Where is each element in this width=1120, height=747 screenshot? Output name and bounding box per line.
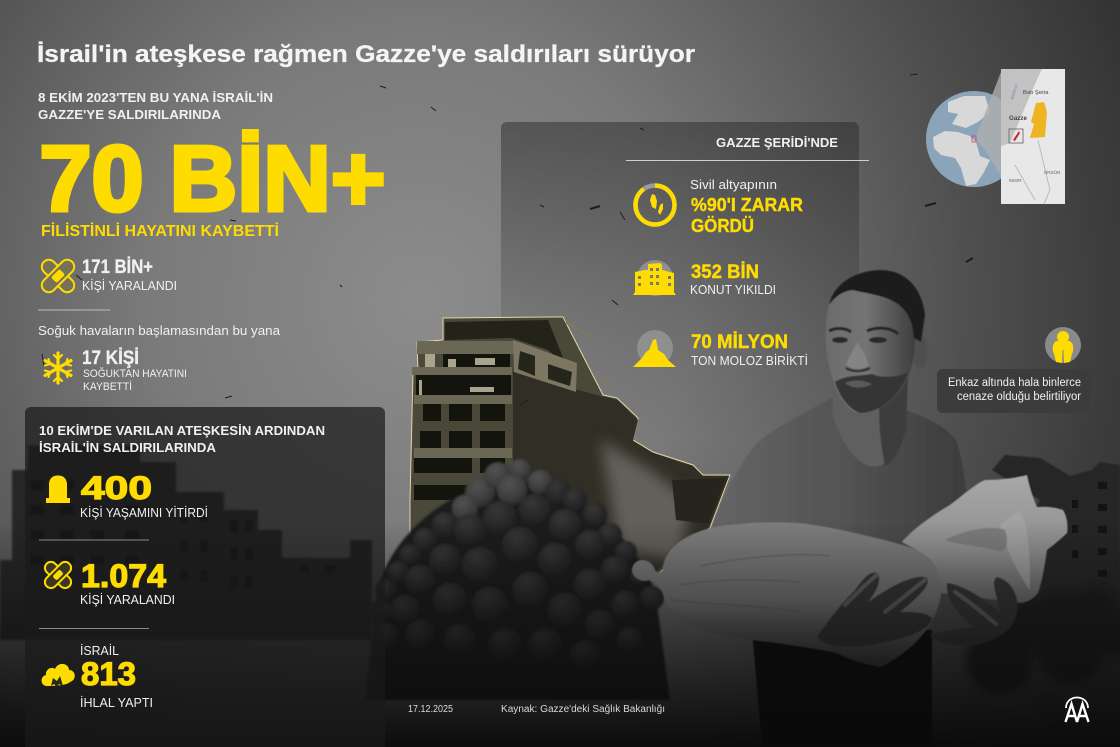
background city left <box>0 445 372 640</box>
callout: bodies under rubble: Enkaz altında hala binlerce <box>948 377 1081 389</box>
wounded stat: KİŞİ YARALANDI <box>82 278 177 293</box>
map labels: Batı Şeria <box>1023 90 1049 96</box>
rubble stat: TON MOLOZ BİRİKTİ <box>691 353 808 368</box>
zoom cone <box>975 72 1001 176</box>
man beard <box>835 372 908 413</box>
source: Kaynak: Gazze'deki Sağlık Bakanlığı <box>501 704 665 715</box>
callout: bodies under rubble <box>937 327 1090 413</box>
cold stat: KAYBETTİ <box>83 380 132 393</box>
killed stat: KİŞİ YAŞAMINI YİTİRDİ <box>80 505 208 520</box>
man face <box>826 287 915 413</box>
icon: bandage <box>39 257 77 295</box>
intro heading <box>38 90 273 122</box>
man shirt <box>712 398 967 600</box>
date: 17.12.2025 <box>408 704 453 715</box>
globe <box>926 72 1001 187</box>
big number: 70 BİN+ <box>40 126 385 230</box>
icon: bandage <box>42 559 74 591</box>
man eyes <box>832 337 848 343</box>
Europe <box>948 96 990 128</box>
infrastructure stat: Sivil altyapının <box>690 177 777 192</box>
panel heading: 10 EKİM'DE VARILAN ATEŞKESİN ARDINDAN <box>39 423 325 438</box>
man nose <box>846 342 868 369</box>
panel heading: İSRAİL'İN SALDIRILARINDA <box>39 440 217 455</box>
icon: siren <box>46 476 70 503</box>
man ear <box>912 335 928 369</box>
man hair <box>829 270 925 342</box>
building silhouette <box>410 317 730 590</box>
cold stat: 17 KİŞİ <box>82 348 139 369</box>
collapsing building <box>410 317 730 590</box>
Gaza box <box>1009 129 1023 143</box>
rubble stat: 70 MİLYON <box>691 332 788 353</box>
hands <box>817 572 932 647</box>
panel background: Gaza Strip <box>501 122 859 440</box>
icon: crouching person <box>1045 327 1081 363</box>
map panel: Gazze <box>1009 115 1027 122</box>
killed stat <box>80 470 208 520</box>
icon: ring with bombs <box>636 186 674 224</box>
housing stat: KONUT YIKILDI <box>690 282 776 297</box>
tilted floor <box>513 340 577 392</box>
killed stat: 400 <box>81 470 152 506</box>
big number caption: FİLİSTİNLİ HAYATINI KAYBETTİ <box>41 223 279 240</box>
top floor <box>445 320 566 365</box>
wounded stat: KİŞİ YARALANDI <box>80 592 175 607</box>
smoke cloud <box>365 459 670 700</box>
violations stat: İHLAL YAPTI <box>80 695 153 710</box>
slabs <box>412 341 514 458</box>
bundle 2 <box>902 475 1068 603</box>
map panel: Akdeniz <box>1009 83 1019 100</box>
intro heading: GAZZE'YE SALDIRILARINDA <box>38 107 222 122</box>
locator map <box>926 69 1065 204</box>
wounded stat <box>82 257 177 293</box>
infrastructure stat: GÖRDÜ <box>691 216 754 236</box>
panel: ceasefire violations <box>25 407 385 747</box>
wounded stat: 171 BİN+ <box>82 257 153 278</box>
housing stat: 352 BİN <box>691 262 759 283</box>
bundle 1 <box>632 522 941 667</box>
callout: bodies under rubble: cenaze olduğu belirtiliyor <box>957 391 1081 403</box>
panel heading: GAZZE ŞERİDİ'NDE <box>716 135 838 150</box>
violations stat <box>80 643 153 710</box>
infrastructure stat <box>690 177 803 236</box>
violations stat: İSRAİL <box>80 643 119 658</box>
man neck <box>832 375 908 467</box>
icon: rubble <box>633 330 676 367</box>
housing stat <box>690 262 776 297</box>
icon: explosion cloud <box>42 664 75 687</box>
map panel: MISIR <box>1009 178 1022 183</box>
logo: AA <box>1066 698 1088 722</box>
windows <box>414 354 511 500</box>
panel content: Gaza Strip <box>626 135 869 368</box>
cold stat <box>82 348 187 393</box>
wounded stat: 1.074 <box>81 558 166 594</box>
violations stat: 813 <box>81 656 136 692</box>
wounded stat <box>80 558 175 607</box>
map panel: ÜRDÜN <box>1044 169 1060 175</box>
man legs <box>752 630 932 747</box>
infrastructure stat: %90'I ZARAR <box>691 195 803 215</box>
left top stats <box>38 90 385 393</box>
West Bank <box>1030 102 1047 138</box>
title: İsrail'in ateşkese rağmen Gazze'ye saldırıları sürüyor <box>37 41 695 68</box>
debris <box>42 74 973 405</box>
rubble stat <box>691 332 808 368</box>
icon: buildings <box>633 260 676 296</box>
map panel <box>1001 69 1065 204</box>
intro heading: 8 EKİM 2023'TEN BU YANA İSRAİL'İN <box>38 90 273 105</box>
man holding wrapped body <box>632 270 1068 747</box>
panel heading <box>39 423 325 455</box>
background ruins right <box>966 455 1120 694</box>
icon: snowflake <box>45 353 71 383</box>
Africa <box>933 131 990 186</box>
right mass <box>513 372 729 585</box>
man brows <box>829 328 898 334</box>
cold stat: SOĞUKTAN HAYATINI <box>83 367 187 380</box>
cold subheading: Soğuk havaların başlamasından bu yana <box>38 323 281 338</box>
bottom fade <box>0 520 1120 747</box>
